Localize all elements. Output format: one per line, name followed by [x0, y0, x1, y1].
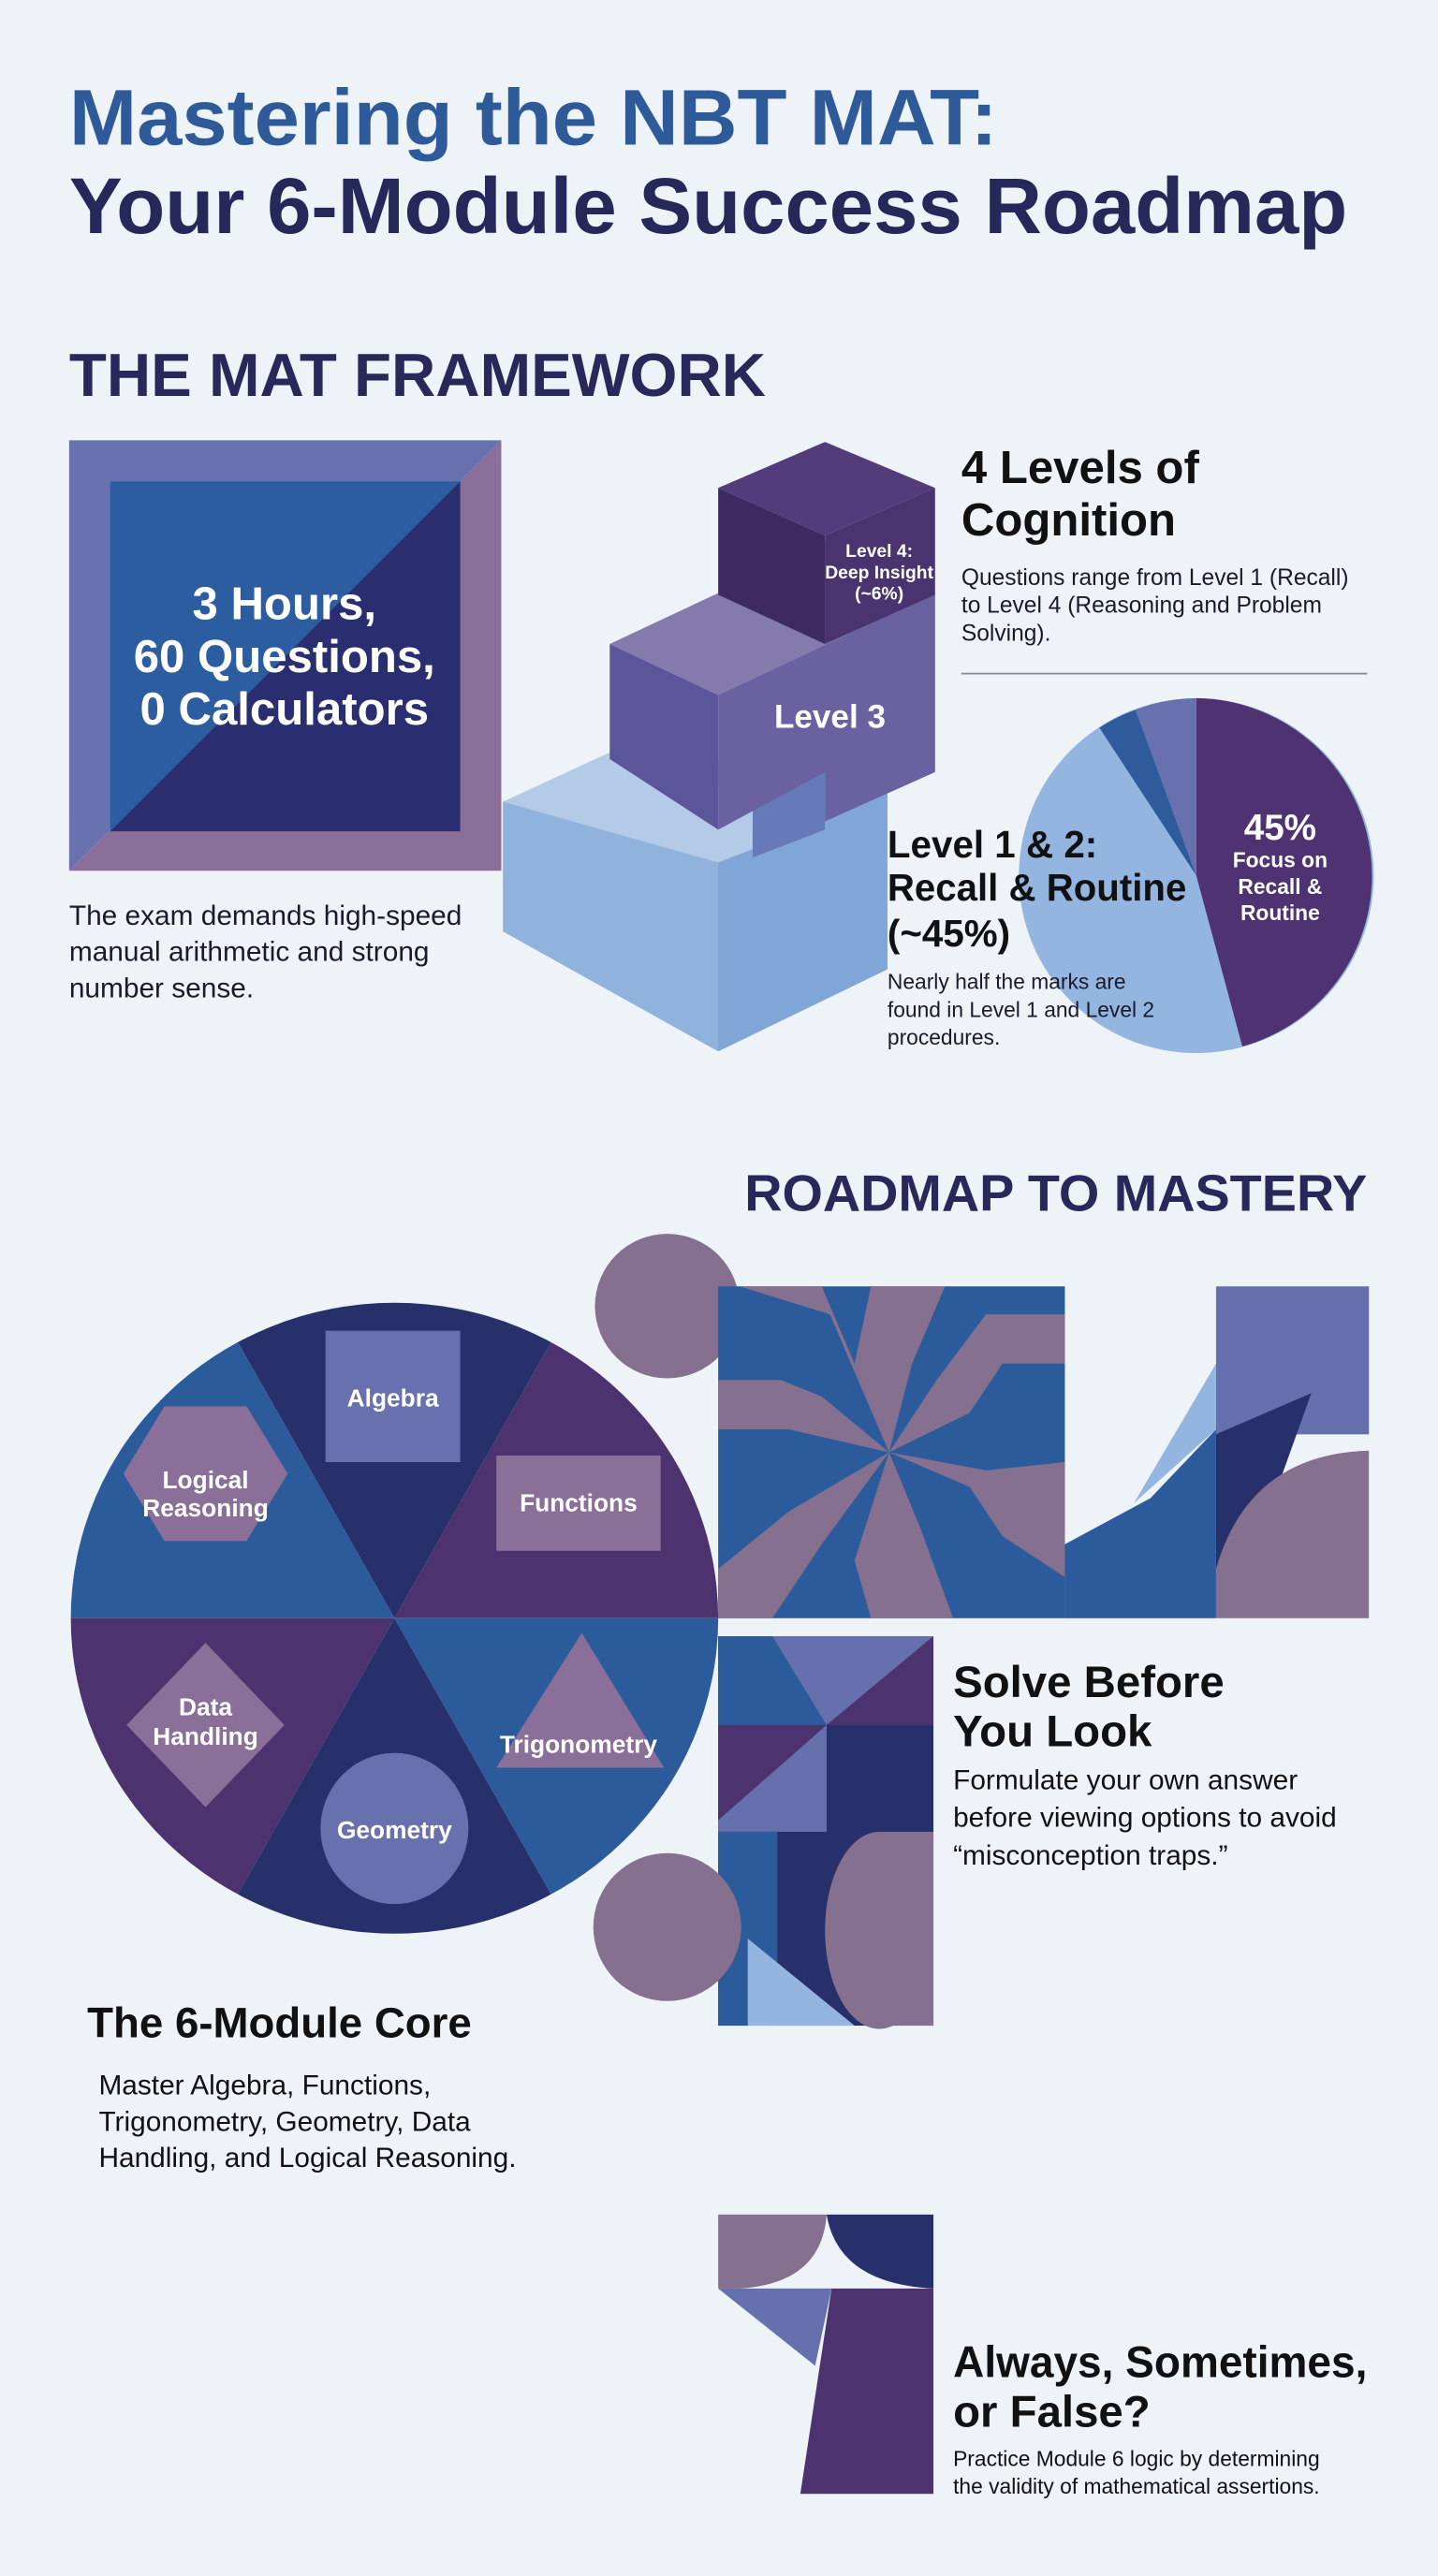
block: level 4: (~6%)	[855, 585, 903, 605]
text: nearly half	[888, 970, 1154, 1049]
text: practice module 6	[953, 2446, 1320, 2498]
title: Your 6-Module Success Roadmap	[69, 162, 1347, 250]
text: questions range: Solving).	[961, 621, 1050, 646]
chart: pie 45%: Recall &	[1238, 874, 1322, 899]
heading: solve before you look	[953, 1658, 1225, 1757]
decorative pattern: top mosaic	[594, 1234, 1369, 1618]
module: algebra: Algebra	[347, 1383, 439, 1412]
panel: exam stats square: 0 Calculators	[140, 684, 429, 735]
heading: always sometimes or false: or False?	[953, 2387, 1151, 2437]
heading: the 6-module core: The 6-Module Core	[87, 1998, 472, 2046]
block: level 4: Level 4:	[845, 542, 913, 562]
module: data handling: Handling	[153, 1722, 258, 1750]
panel: exam stats square	[69, 440, 501, 871]
module: logical reasoning	[124, 1406, 287, 1541]
panel: exam stats square: 60 Questions,	[134, 632, 435, 682]
text: formulate: Formulate your own answer	[953, 1764, 1298, 1795]
module: functions	[496, 1456, 661, 1551]
panel: exam stats square: 3 Hours,	[192, 579, 376, 630]
heading: level 1 & 2	[888, 823, 1186, 955]
chart: cognition level blocks	[503, 442, 935, 1051]
block: level 3: Level 3	[774, 699, 886, 736]
heading: 4 levels of cognition: Cognition	[961, 495, 1176, 546]
title	[69, 73, 1347, 250]
module: data handling	[126, 1643, 285, 1808]
heading: 4 levels of cognition: 4 Levels of	[961, 443, 1199, 493]
chart: 6-module wheel	[71, 1303, 719, 1934]
module: trigonometry: Trigonometry	[500, 1731, 657, 1759]
module: algebra	[326, 1331, 461, 1462]
text: exam demands: number sense.	[69, 973, 254, 1003]
text: questions range: Questions range from Level 1 (Recall)	[961, 565, 1349, 591]
text: master algebra: Trigonometry, Geometry, Data	[98, 2106, 471, 2137]
heading: the mat framework: THE MAT FRAMEWORK	[69, 341, 766, 409]
module: trigonometry	[496, 1633, 664, 1767]
heading: always sometimes or false	[953, 2338, 1367, 2437]
text: practice module 6: Practice Module 6 logic by determining	[953, 2446, 1320, 2470]
title: Mastering the NBT MAT:	[69, 73, 997, 161]
module: data handling: Data	[179, 1692, 232, 1720]
text: nearly half: Nearly half the marks are	[888, 970, 1126, 994]
chart: pie 45%: Routine	[1240, 900, 1320, 925]
text: questions range: to Level 4 (Reasoning and Problem	[961, 593, 1322, 619]
block: level 1 & 2	[503, 748, 888, 1051]
text: nearly half: found in Level 1 and Level 2	[888, 997, 1154, 1021]
module: geometry: Geometry	[337, 1816, 452, 1844]
block: level 4: Deep Insight	[825, 564, 934, 583]
text: formulate	[953, 1764, 1337, 1871]
heading: level 1 & 2: Level 1 & 2:	[888, 823, 1097, 866]
heading: level 1 & 2: (~45%)	[888, 912, 1010, 955]
decorative pattern: middle mosaic	[594, 1636, 933, 2029]
block: level 3	[609, 542, 935, 829]
module: geometry	[320, 1753, 468, 1904]
text: master algebra: Master Algebra, Functions,	[98, 2071, 431, 2101]
heading: solve before you look: Solve Before	[953, 1658, 1225, 1707]
text: practice module 6: the validity of mathematical assertions.	[953, 2474, 1320, 2498]
block: level 4	[718, 442, 935, 644]
heading: solve before you look: You Look	[953, 1707, 1152, 1757]
heading: level 1 & 2: Recall & Routine	[888, 866, 1186, 909]
text: questions range	[961, 565, 1349, 646]
chart: pie 45%	[1019, 698, 1373, 1053]
heading: roadmap to mastery: ROADMAP TO MASTERY	[744, 1165, 1367, 1222]
module: functions: Functions	[520, 1489, 638, 1517]
module: logical reasoning: Reasoning	[142, 1494, 269, 1522]
text: formulate: before viewing options to avoid	[953, 1803, 1337, 1834]
text: exam demands: The exam demands high-speed	[69, 900, 462, 931]
text: formulate: “misconception traps.”	[953, 1840, 1228, 1871]
text: exam demands: manual arithmetic and strong	[69, 937, 430, 968]
text: nearly half: procedures.	[888, 1025, 1000, 1049]
heading: always sometimes or false: Always, Sometimes,	[953, 2338, 1367, 2388]
text: exam demands	[69, 900, 462, 1003]
text: master algebra	[98, 2071, 517, 2174]
module: logical reasoning: Logical	[162, 1466, 249, 1494]
decorative pattern: bottom mosaic	[718, 2215, 933, 2494]
text: master algebra: Handling, and Logical Reasoning.	[98, 2143, 517, 2174]
heading: 4 levels of cognition	[961, 443, 1199, 546]
chart: pie 45%: 45%	[1244, 808, 1316, 848]
chart: pie 45%: Focus on	[1233, 848, 1328, 872]
